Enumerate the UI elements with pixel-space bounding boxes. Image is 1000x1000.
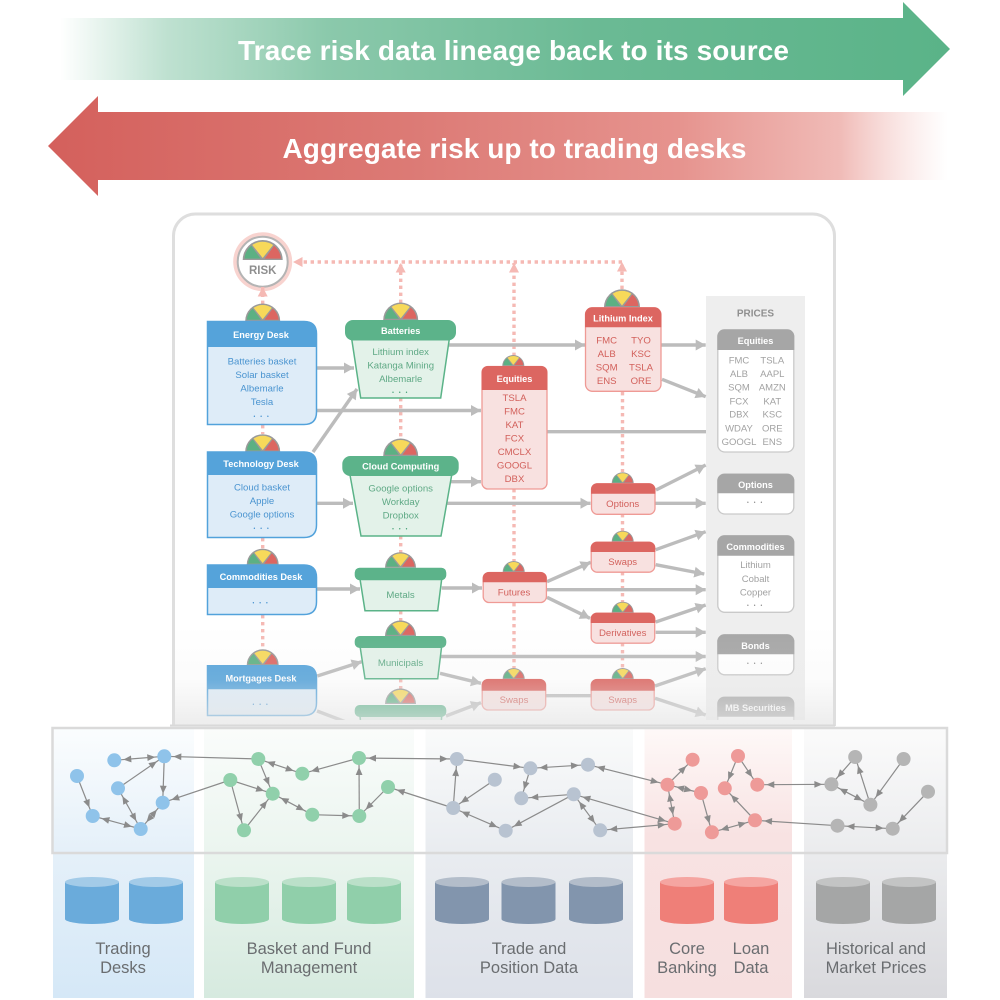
source: historical and market prices xyxy=(816,877,936,977)
nodes: basket and fund management xyxy=(223,751,395,837)
basket: Batteries: Batteries xyxy=(381,326,420,336)
table: Equities: CMCLX xyxy=(498,447,532,458)
prices card: Commodities: Commodities xyxy=(726,542,785,552)
source: core banking and loan data: Banking xyxy=(657,959,717,977)
prices card: Options: Options xyxy=(738,480,773,490)
source: core banking and loan data: Core xyxy=(669,940,705,958)
source: core banking and loan data: Data xyxy=(734,959,769,977)
nodes: trade and position data xyxy=(446,752,607,838)
table: Equities: FCX xyxy=(505,434,525,444)
heading: prices: PRICES xyxy=(737,308,774,320)
panel: prices column background xyxy=(706,296,805,726)
table: Lithium Index: ENS xyxy=(597,376,617,387)
basket: Cloud Computing: Google options xyxy=(368,484,433,494)
table: Swaps lower right: Swaps xyxy=(608,695,637,706)
nodes: core banking and loan data xyxy=(660,749,764,839)
prices card: Options xyxy=(717,474,794,514)
prices card: Commodities: • • • xyxy=(747,603,764,609)
arrow: aggregate risk xyxy=(48,96,948,196)
table: Options xyxy=(591,472,655,514)
prices card: Bonds xyxy=(717,634,794,675)
nodes: historical and market prices xyxy=(824,750,935,836)
table: Futures xyxy=(483,561,547,602)
prices card: Equities: FCX xyxy=(730,396,749,408)
table: Equities: Equities xyxy=(497,374,532,384)
basket: Cloud Computing: Cloud Computing xyxy=(362,462,439,472)
prices card: Equities: AMZN xyxy=(759,383,786,394)
desk: Energy Desk: Energy Desk xyxy=(233,330,290,340)
table: Lithium Index: FMC xyxy=(596,336,617,346)
desk: Mortgages Desk xyxy=(207,649,317,716)
desk: Energy Desk: Solar basket xyxy=(235,370,289,381)
table: Lithium Index: ORE xyxy=(631,376,651,387)
desk: Technology Desk: Technology Desk xyxy=(223,459,300,469)
prices card: Bonds: • • • xyxy=(747,661,764,667)
source: trading desks xyxy=(65,877,183,977)
icon: risk gauge: RISK xyxy=(249,265,277,277)
basket: Metals: Metals xyxy=(386,590,415,601)
prices card: Equities: ALB xyxy=(730,369,748,380)
source: trading desks: Desks xyxy=(100,959,146,977)
basket: Cloud Computing: Dropbox xyxy=(383,510,419,522)
table: Lithium Index: TSLA xyxy=(629,362,654,374)
desk: Commodities Desk: • • • xyxy=(252,600,270,606)
network graph: data lineage nodes and edges xyxy=(70,749,935,839)
source: basket and fund management: Basket and Fund xyxy=(247,940,371,958)
desk: Technology Desk: • • • xyxy=(253,526,271,532)
desk: Technology Desk: Cloud basket xyxy=(234,482,290,494)
prices card: Commodities xyxy=(717,535,794,612)
prices card: Equities: ENS xyxy=(763,437,782,448)
prices card: Commodities: Lithium xyxy=(740,560,771,571)
prices card: Equities: ORE xyxy=(762,424,783,434)
prices card: Equities: AAPL xyxy=(760,369,784,380)
heading: trace lineage: Trace risk data lineage back to its source xyxy=(238,35,789,66)
basket: Batteries: • • • xyxy=(392,390,409,396)
arrow: trace risk data lineage xyxy=(60,2,950,96)
basket: Batteries xyxy=(345,302,456,398)
desk: Commodities Desk: Commodities Desk xyxy=(220,572,303,582)
basket: Cloud Computing: Workday xyxy=(382,497,420,508)
panel: laptop risk diagram xyxy=(170,214,835,737)
table: Swaps upper: Swaps xyxy=(608,557,637,568)
basket: Cloud Computing xyxy=(342,438,459,536)
icon: risk gauge xyxy=(233,232,292,304)
prices card: Equities: GOOGL xyxy=(722,437,756,448)
desk: Mortgages Desk: • • • xyxy=(252,702,270,708)
source: trade and position data: Trade and xyxy=(492,940,566,958)
prices card: MB Securities: MB Securities xyxy=(725,703,786,713)
basket: Batteries: Albemarle xyxy=(379,374,422,385)
prices card: Equities: KSC xyxy=(763,410,782,421)
prices card: Equities: DBX xyxy=(729,410,749,421)
table: Equities xyxy=(482,355,547,489)
desk: Energy Desk: Batteries basket xyxy=(228,356,297,368)
basket: unnamed bottom basket xyxy=(354,688,446,720)
table: Options: Options xyxy=(606,499,639,510)
table: Swaps lower right xyxy=(591,668,655,710)
table: Swaps lower left: Swaps xyxy=(500,695,529,706)
table: Lithium Index: KSC xyxy=(631,349,651,360)
table: Swaps upper xyxy=(591,531,655,572)
desk: Technology Desk xyxy=(207,434,317,538)
source: basket and fund management: Management xyxy=(261,959,358,977)
basket: Municipals xyxy=(355,620,446,679)
table: Equities: TSLA xyxy=(502,393,527,404)
prices card: Commodities: Copper xyxy=(740,588,771,598)
basket: Batteries: Lithium index xyxy=(372,347,429,358)
basket: Cloud Computing: • • • xyxy=(392,526,409,532)
heading: aggregate risk: Aggregate risk up to trading desks xyxy=(282,133,746,164)
basket: Batteries: Katanga Mining xyxy=(367,360,434,372)
desk: Technology Desk: Google options xyxy=(230,510,294,520)
source: core banking and loan data: Loan xyxy=(733,940,769,958)
prices card: Equities xyxy=(717,329,794,452)
basket: Metals xyxy=(355,552,446,611)
table: Derivatives xyxy=(591,602,655,643)
desk: Energy Desk: Albemarle xyxy=(240,384,284,394)
desk: Energy Desk xyxy=(207,304,317,424)
basket: Municipals: Municipals xyxy=(378,658,423,669)
table: Lithium Index: SQM xyxy=(596,362,618,374)
prices card: Equities: KAT xyxy=(763,396,781,408)
prices card: Bonds: Bonds xyxy=(741,641,770,651)
source: trading desks: Trading xyxy=(95,940,151,958)
table: Lithium Index: TYO xyxy=(631,336,651,346)
prices card: Equities: WDAY xyxy=(725,424,754,434)
source: historical and market prices: Market Prices xyxy=(826,959,926,977)
prices card: Commodities: Cobalt xyxy=(742,574,770,585)
table: Equities: GOOGL xyxy=(497,460,533,472)
desk: Energy Desk: Tesla xyxy=(251,397,274,408)
source: historical and market prices: Historical and xyxy=(826,940,926,958)
desk: Commodities Desk xyxy=(207,549,317,614)
table: Equities: FMC xyxy=(504,406,525,418)
prices card: Equities: FMC xyxy=(729,356,749,366)
prices card: Equities: TSLA xyxy=(760,356,785,366)
source: core banking and loan data xyxy=(657,877,778,977)
prices card: Equities: SQM xyxy=(728,383,750,394)
prices card: MB Securities xyxy=(717,696,794,720)
nodes: trading desks xyxy=(70,749,171,836)
table: Lithium Index xyxy=(585,289,661,391)
dotted risk aggregation lines xyxy=(263,262,622,689)
table: Swaps lower left xyxy=(482,668,546,710)
table: Equities: KAT xyxy=(506,420,524,431)
panel: source system columns background xyxy=(53,728,947,998)
table: Futures: Futures xyxy=(498,588,530,598)
source: trade and position data: Position Data xyxy=(480,959,579,977)
table: Derivatives: Derivatives xyxy=(599,628,647,639)
prices card: Options: • • • xyxy=(747,500,764,506)
gray data flow arrows xyxy=(313,345,706,722)
table: Lithium Index: ALB xyxy=(598,349,616,360)
source: basket and fund management xyxy=(215,877,401,977)
desk: Mortgages Desk: Mortgages Desk xyxy=(226,674,297,684)
desk: Energy Desk: • • • xyxy=(253,414,271,420)
desk: Technology Desk: Apple xyxy=(250,496,274,507)
table: Lithium Index: Lithium Index xyxy=(593,314,654,324)
table: Equities: DBX xyxy=(505,474,525,485)
panel: data graph frame xyxy=(52,728,947,853)
prices card: Equities: Equities xyxy=(738,336,773,346)
source: trade and position data xyxy=(435,877,623,977)
